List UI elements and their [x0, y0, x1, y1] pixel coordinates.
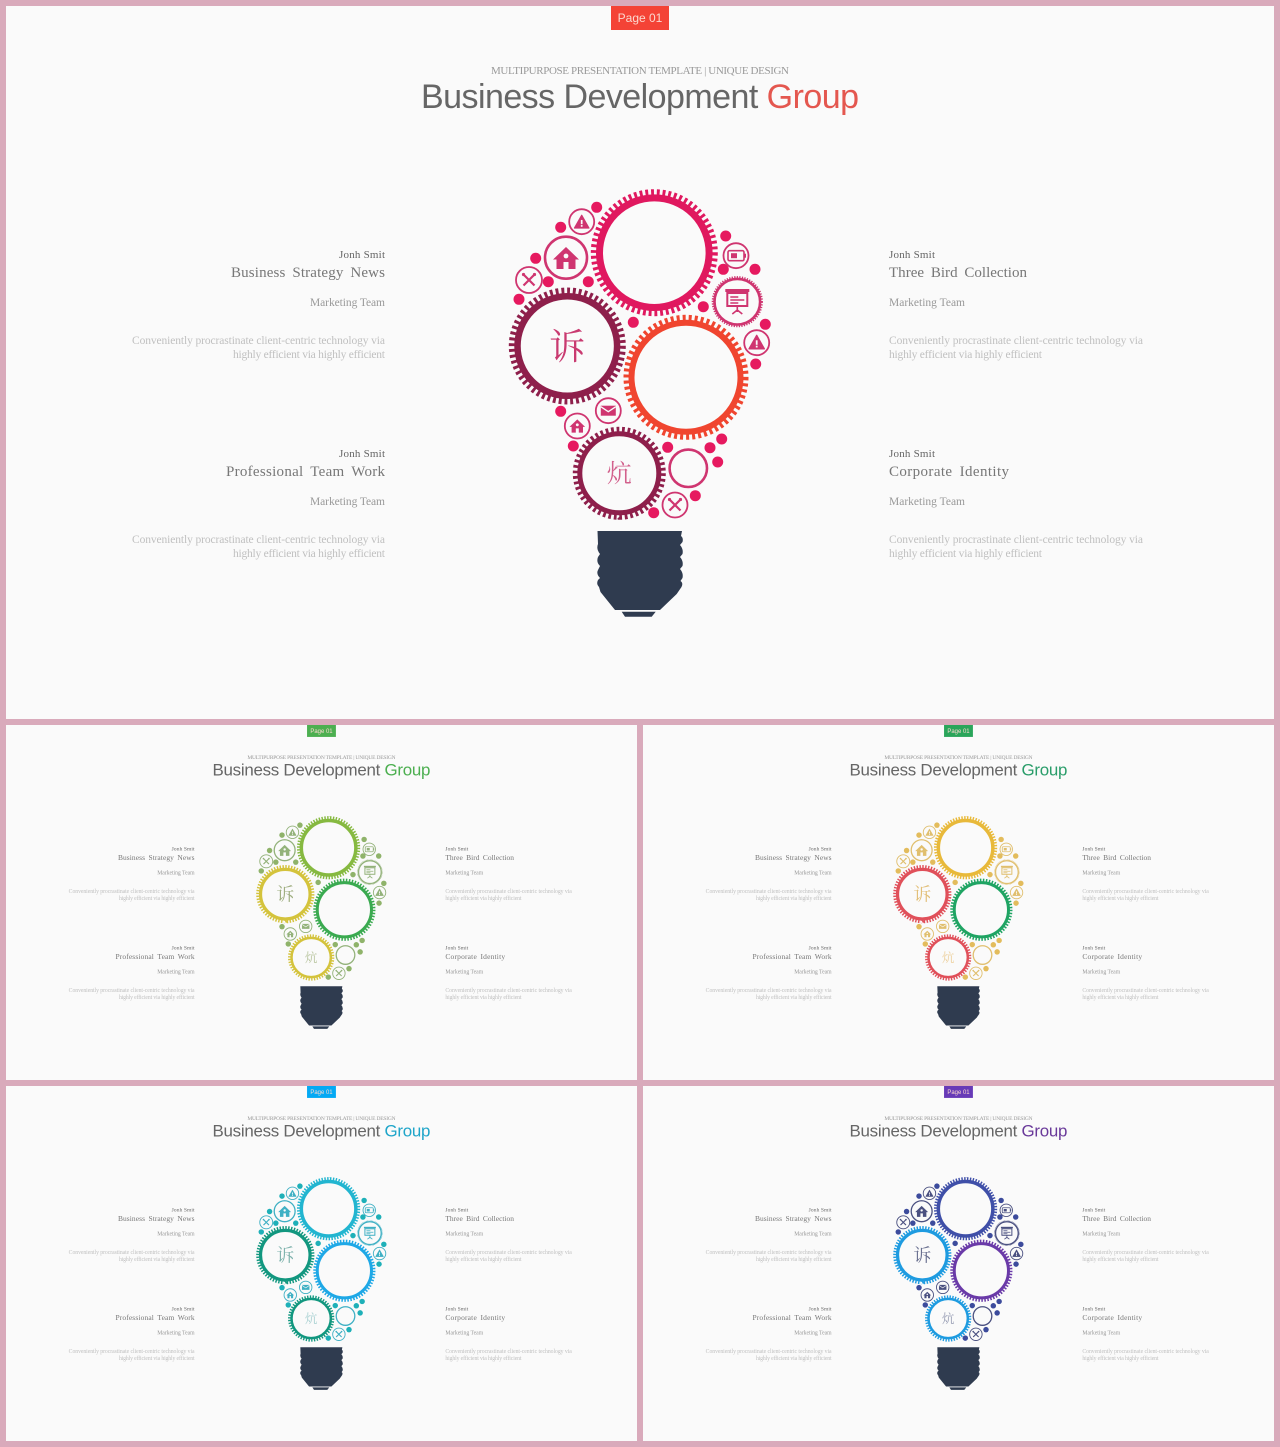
text block: Professional Team Work: Professional Team Work — [226, 464, 386, 480]
panel: blue slide — [69, 1086, 572, 1390]
text block: Three Bird Collection: Marketing Team — [889, 297, 965, 309]
light bulb of gears — [512, 192, 771, 617]
text block: Professional Team Work — [132, 448, 386, 560]
page tag — [611, 6, 669, 30]
subtitle: MULTIPURPOSE PRESENTATION TEMPLATE | UNIQUE DESIGN — [247, 1116, 396, 1122]
text block: Corporate Identity: highly efficient via highly efficient — [445, 994, 522, 1001]
text block: Three Bird Collection: Jonh Smit — [1082, 1207, 1106, 1213]
light bulb of gears: 炕 — [305, 950, 318, 965]
gear: top pink — [594, 192, 715, 313]
page tag: Page 01 — [947, 729, 970, 735]
text block: Professional Team Work: Conveniently procrastinate client-centric technology via — [706, 988, 832, 994]
text block: Business Strategy News: Marketing Team — [794, 870, 832, 876]
text block: Three Bird Collection: Jonh Smit — [1082, 846, 1106, 852]
title: Business Development Group — [421, 78, 859, 116]
text block: Corporate Identity: Jonh Smit — [1082, 945, 1106, 951]
text block: Three Bird Collection: Three Bird Collection — [1082, 1214, 1151, 1223]
text block: Professional Team Work: Conveniently procrastinate client-centric technology via — [706, 1349, 832, 1355]
panel: main slide background — [6, 6, 1274, 719]
panel: main slide — [132, 6, 1143, 617]
text block: Corporate Identity: Conveniently procrastinate client-centric technology via — [889, 534, 1143, 546]
text block: Business Strategy News: Jonh Smit — [809, 1207, 832, 1213]
text block: Corporate Identity — [445, 945, 572, 1001]
bulb base — [597, 531, 683, 617]
text block: Business Strategy News: Conveniently procrastinate client-centric technology via — [706, 889, 832, 895]
text block: Business Strategy News: Jonh Smit — [339, 249, 385, 261]
text block: Business Strategy News: Business Strategy News — [118, 853, 195, 862]
text block: Professional Team Work: Marketing Team — [794, 969, 832, 975]
text block: Corporate Identity: Marketing Team — [1082, 1330, 1121, 1336]
title: Business Development Group — [213, 1122, 430, 1141]
text block: Three Bird Collection: Jonh Smit — [445, 1207, 469, 1213]
small dots — [514, 202, 771, 518]
text block: Professional Team Work: Jonh Smit — [172, 1306, 195, 1312]
text block: Three Bird Collection — [445, 1207, 572, 1263]
text block: Three Bird Collection: Three Bird Collection — [445, 1214, 514, 1223]
light bulb of gears: 诉 — [913, 1246, 931, 1266]
panel: purple slide — [706, 1086, 1209, 1390]
text block: Professional Team Work: Jonh Smit — [809, 945, 832, 951]
text block: Business Strategy News: Marketing Team — [310, 297, 385, 309]
subtitle: MULTIPURPOSE PRESENTATION TEMPLATE | UNIQUE DESIGN — [247, 755, 396, 761]
text block: Three Bird Collection: Marketing Team — [445, 1231, 484, 1237]
icons: alert, home, tools, battery, board, mail — [522, 215, 764, 510]
text block: Corporate Identity: Corporate Identity — [1082, 952, 1142, 961]
text block: Business Strategy News: Marketing Team — [794, 1231, 832, 1237]
text block: Corporate Identity: Corporate Identity — [1082, 1313, 1142, 1322]
text block: Corporate Identity: highly efficient via highly efficient — [1082, 1355, 1159, 1362]
text block: Three Bird Collection: highly efficient via highly efficient — [1082, 895, 1159, 902]
text block: Business Strategy News: Jonh Smit — [172, 846, 195, 852]
text block: Three Bird Collection: Jonh Smit — [889, 249, 935, 261]
text block: Professional Team Work: Marketing Team — [157, 1330, 195, 1336]
panel: yellow slide — [706, 725, 1209, 1029]
text block: Three Bird Collection: Three Bird Collection — [889, 265, 1028, 281]
text block: Business Strategy News — [69, 846, 195, 902]
text block: Professional Team Work: Marketing Team — [310, 496, 385, 508]
text block: Three Bird Collection: highly efficient via highly efficient — [445, 1256, 522, 1263]
text block: Three Bird Collection: Three Bird Collection — [445, 853, 514, 862]
text block: Professional Team Work: Professional Team Work — [115, 1313, 195, 1322]
text block: Professional Team Work: Jonh Smit — [809, 1306, 832, 1312]
text block: Professional Team Work: highly efficient via highly efficient — [233, 548, 386, 560]
text block: Business Strategy News — [706, 1207, 832, 1263]
text block: Professional Team Work — [706, 945, 832, 1001]
text block: Business Strategy News: Jonh Smit — [809, 846, 832, 852]
text block: Business Strategy News: highly efficient via highly efficient — [756, 895, 832, 902]
gear: bottom maroon — [576, 430, 663, 517]
text block: Three Bird Collection — [1082, 846, 1209, 902]
page tag: Page 01 — [310, 1090, 333, 1096]
text block: Three Bird Collection: highly efficient via highly efficient — [445, 895, 522, 902]
text block: Three Bird Collection: Marketing Team — [1082, 870, 1121, 876]
text block: Three Bird Collection: Conveniently procrastinate client-centric technology via — [445, 1250, 572, 1256]
text block: Business Strategy News: Business Strategy News — [118, 1214, 195, 1223]
light bulb of gears — [895, 1179, 1024, 1390]
gear label left: 诉 — [549, 327, 585, 367]
title: Business Development Group — [213, 761, 430, 780]
light bulb of gears: 诉 — [276, 1246, 294, 1266]
text block: Business Strategy News: Conveniently procrastinate client-centric technology via — [706, 1250, 832, 1256]
text block: Three Bird Collection: Jonh Smit — [445, 846, 469, 852]
page tag — [944, 725, 973, 737]
text block: Three Bird Collection — [889, 249, 1143, 361]
text block: Three Bird Collection — [1082, 1207, 1209, 1263]
text block: Business Strategy News: Marketing Team — [157, 1231, 195, 1237]
text block: Business Strategy News: highly efficient via highly efficient — [119, 1256, 195, 1263]
text block: Professional Team Work: Marketing Team — [794, 1330, 832, 1336]
text block: Three Bird Collection: Marketing Team — [445, 870, 484, 876]
text block: Corporate Identity: Corporate Identity — [445, 952, 505, 961]
text block: Corporate Identity — [1082, 945, 1209, 1001]
text block: Professional Team Work: Jonh Smit — [339, 448, 385, 460]
text block: Business Strategy News — [69, 1207, 195, 1263]
page tag — [944, 1086, 973, 1098]
text block: Corporate Identity: Conveniently procrastinate client-centric technology via — [1082, 988, 1209, 994]
text block: Three Bird Collection: Conveniently procrastinate client-centric technology via — [1082, 1250, 1209, 1256]
light bulb of gears — [895, 818, 1024, 1029]
small icon gears — [516, 209, 769, 517]
text block: Corporate Identity: Conveniently procrastinate client-centric technology via — [445, 1349, 572, 1355]
text block: Professional Team Work — [706, 1306, 832, 1362]
page tag: Page 01 — [310, 729, 333, 735]
panel: purple slide background — [643, 1086, 1274, 1441]
text block: Business Strategy News: Business Strategy News — [231, 265, 385, 281]
title: Business Development Group — [850, 761, 1067, 780]
text block: Three Bird Collection: highly efficient via highly efficient — [889, 349, 1043, 361]
text block: Professional Team Work: highly efficient via highly efficient — [119, 1355, 195, 1362]
text block: Three Bird Collection: Marketing Team — [1082, 1231, 1121, 1237]
text block: Business Strategy News — [706, 846, 832, 902]
text block: Corporate Identity: Marketing Team — [445, 969, 484, 975]
text block: Corporate Identity: Jonh Smit — [445, 945, 469, 951]
text block: Corporate Identity: highly efficient via highly efficient — [445, 1355, 522, 1362]
text block: Professional Team Work: Conveniently procrastinate client-centric technology via — [132, 534, 385, 546]
text block: Professional Team Work: highly efficient via highly efficient — [756, 1355, 832, 1362]
subtitle: MULTIPURPOSE PRESENTATION TEMPLATE | UNIQUE DESIGN — [491, 65, 789, 77]
light bulb of gears: 诉 — [276, 885, 294, 905]
text block: Professional Team Work: Marketing Team — [157, 969, 195, 975]
text block: Business Strategy News: highly efficient via highly efficient — [233, 349, 386, 361]
text block: Three Bird Collection: Conveniently procrastinate client-centric technology via — [889, 335, 1143, 347]
text block: Business Strategy News: Jonh Smit — [172, 1207, 195, 1213]
text block: Business Strategy News: highly efficient via highly efficient — [756, 1256, 832, 1263]
page tag: Page 01 — [618, 11, 663, 25]
text block: Professional Team Work: Jonh Smit — [172, 945, 195, 951]
light bulb of gears: 炕 — [942, 950, 955, 965]
text block: Three Bird Collection: Three Bird Collection — [1082, 853, 1151, 862]
text block: Corporate Identity: highly efficient via highly efficient — [889, 548, 1043, 560]
text block: Corporate Identity — [445, 1306, 572, 1362]
text block: Corporate Identity: Jonh Smit — [889, 448, 935, 460]
text block: Business Strategy News: Business Strategy News — [755, 1214, 832, 1223]
text block: Corporate Identity: Marketing Team — [445, 1330, 484, 1336]
text block: Corporate Identity: Corporate Identity — [889, 464, 1010, 480]
text block: Three Bird Collection: Conveniently procrastinate client-centric technology via — [1082, 889, 1209, 895]
text block: Professional Team Work: Professional Team Work — [752, 952, 832, 961]
page tag — [307, 725, 336, 737]
text block: Business Strategy News: Conveniently procrastinate client-centric technology via — [69, 1250, 195, 1256]
light bulb of gears: 诉 — [913, 885, 931, 905]
text block: Corporate Identity: Conveniently procrastinate client-centric technology via — [445, 988, 572, 994]
light bulb of gears: 炕 — [942, 1311, 955, 1326]
text block: Corporate Identity: highly efficient via highly efficient — [1082, 994, 1159, 1001]
panel: green slide — [69, 725, 572, 1029]
light bulb of gears — [258, 1179, 387, 1390]
text block: Business Strategy News: Conveniently procrastinate client-centric technology via — [132, 335, 385, 347]
gear label bottom: 炕 — [607, 460, 632, 488]
text block: Professional Team Work — [69, 1306, 195, 1362]
light bulb of gears — [258, 818, 387, 1029]
title: Business Development Group — [850, 1122, 1067, 1141]
text block: Corporate Identity: Marketing Team — [889, 496, 965, 508]
gear: right orange — [626, 318, 746, 437]
text block: Three Bird Collection: Conveniently procrastinate client-centric technology via — [445, 889, 572, 895]
gear: left maroon — [512, 290, 623, 402]
text block: Business Strategy News: Conveniently procrastinate client-centric technology via — [69, 889, 195, 895]
text block: Business Strategy News: highly efficient via highly efficient — [119, 895, 195, 902]
panel: blue slide background — [6, 1086, 637, 1441]
text block: Corporate Identity: Conveniently procrastinate client-centric technology via — [1082, 1349, 1209, 1355]
subtitle: MULTIPURPOSE PRESENTATION TEMPLATE | UNIQUE DESIGN — [884, 755, 1033, 761]
text block: Professional Team Work: Professional Team Work — [115, 952, 195, 961]
subtitle: MULTIPURPOSE PRESENTATION TEMPLATE | UNIQUE DESIGN — [884, 1116, 1033, 1122]
text block: Corporate Identity: Jonh Smit — [445, 1306, 469, 1312]
text block: Business Strategy News: Business Strategy News — [755, 853, 832, 862]
text block: Professional Team Work: highly efficient via highly efficient — [119, 994, 195, 1001]
text block: Corporate Identity — [889, 448, 1143, 560]
text block: Professional Team Work — [69, 945, 195, 1001]
text block: Three Bird Collection — [445, 846, 572, 902]
panel: green slide background — [6, 725, 637, 1080]
text block: Professional Team Work: Conveniently procrastinate client-centric technology via — [69, 988, 195, 994]
panel: yellow slide background — [643, 725, 1274, 1080]
text block: Corporate Identity: Jonh Smit — [1082, 1306, 1106, 1312]
text block: Three Bird Collection: highly efficient via highly efficient — [1082, 1256, 1159, 1263]
text block: Corporate Identity — [1082, 1306, 1209, 1362]
page tag — [307, 1086, 336, 1098]
text block: Corporate Identity: Marketing Team — [1082, 969, 1121, 975]
page tag: Page 01 — [947, 1090, 970, 1096]
text block: Corporate Identity: Corporate Identity — [445, 1313, 505, 1322]
text block: Business Strategy News: Marketing Team — [157, 870, 195, 876]
text block: Professional Team Work: Professional Team Work — [752, 1313, 832, 1322]
text block: Professional Team Work: highly efficient via highly efficient — [756, 994, 832, 1001]
text block: Business Strategy News — [132, 249, 386, 361]
text block: Professional Team Work: Conveniently procrastinate client-centric technology via — [69, 1349, 195, 1355]
light bulb of gears: 炕 — [305, 1311, 318, 1326]
